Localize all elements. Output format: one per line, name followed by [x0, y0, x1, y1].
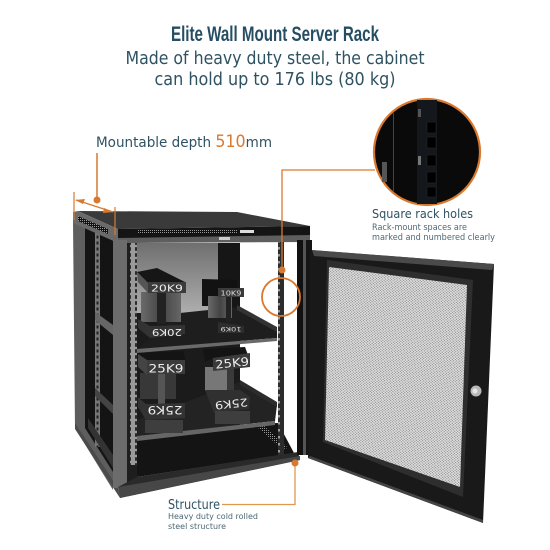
weight: 20 kg left [137, 268, 186, 338]
weight: 10 kg right: 10K9 [220, 325, 242, 333]
leader line with dot [94, 153, 100, 204]
bottom base [118, 424, 300, 498]
cabinet top plate [73, 211, 310, 243]
hinge post [297, 240, 312, 455]
rail highlight ring [262, 278, 300, 316]
square rack holes description: marked and numbered clearly [372, 233, 495, 243]
structure dot [292, 460, 298, 466]
connector line [282, 170, 375, 270]
front right rack rail [278, 242, 284, 455]
cabinet interior back wall [137, 243, 218, 315]
structure leader line [222, 463, 295, 504]
callout: mountable depth [74, 132, 272, 235]
weight: 25 kg right [203, 347, 250, 424]
weight: 20 kg left: 20K9 [152, 326, 182, 337]
subtitle: Made of heavy duty steel, the cabinet [126, 48, 424, 69]
structure description: steel structure [168, 522, 226, 531]
weight: 25 kg right: 25K9 [214, 395, 248, 412]
magnified rack holes circle [374, 99, 480, 205]
callout: structure [168, 460, 298, 531]
cabinet floor [137, 423, 294, 477]
weight: 25 kg left: 25K9 [148, 403, 182, 417]
mesh panel [325, 267, 467, 487]
depth dimension arrow [74, 192, 115, 235]
connector dot [278, 266, 286, 274]
rear pillar [218, 243, 240, 313]
cabinet left side panel [73, 222, 120, 498]
callout: square rack holes [262, 99, 495, 316]
mountable depth label: Mountable depth 510mm [96, 132, 272, 152]
upper shelf [137, 305, 277, 353]
square rack holes description: Rack-mount spaces are [372, 223, 467, 233]
structure heading: Structure [168, 498, 220, 513]
structure description: Heavy duty cold rolled [168, 512, 258, 521]
title: Elite Wall Mount Server Rack [171, 23, 379, 46]
subtitle [126, 48, 424, 90]
weight: 25 kg left [137, 351, 186, 433]
door inner frame [323, 260, 473, 497]
subtitle: can hold up to 176 lbs (80 kg) [154, 69, 396, 90]
door knob [470, 386, 482, 396]
weight: 25 kg right: 25K9 [214, 354, 250, 372]
square rack holes heading: Square rack holes [372, 206, 473, 221]
weight: 10 kg right: 10K9 [220, 290, 242, 298]
door frame [308, 250, 494, 523]
lower shelf [137, 380, 277, 441]
server rack cabinet [73, 211, 312, 498]
weight: 25 kg left: 25K9 [148, 362, 184, 376]
open perforated door [308, 250, 494, 523]
structure description [168, 512, 258, 531]
weight: 10 kg right [202, 279, 244, 333]
square rack holes description [372, 223, 495, 243]
front left pillar with rack rail [113, 240, 137, 488]
weight: 20 kg left: 20K9 [151, 284, 183, 294]
